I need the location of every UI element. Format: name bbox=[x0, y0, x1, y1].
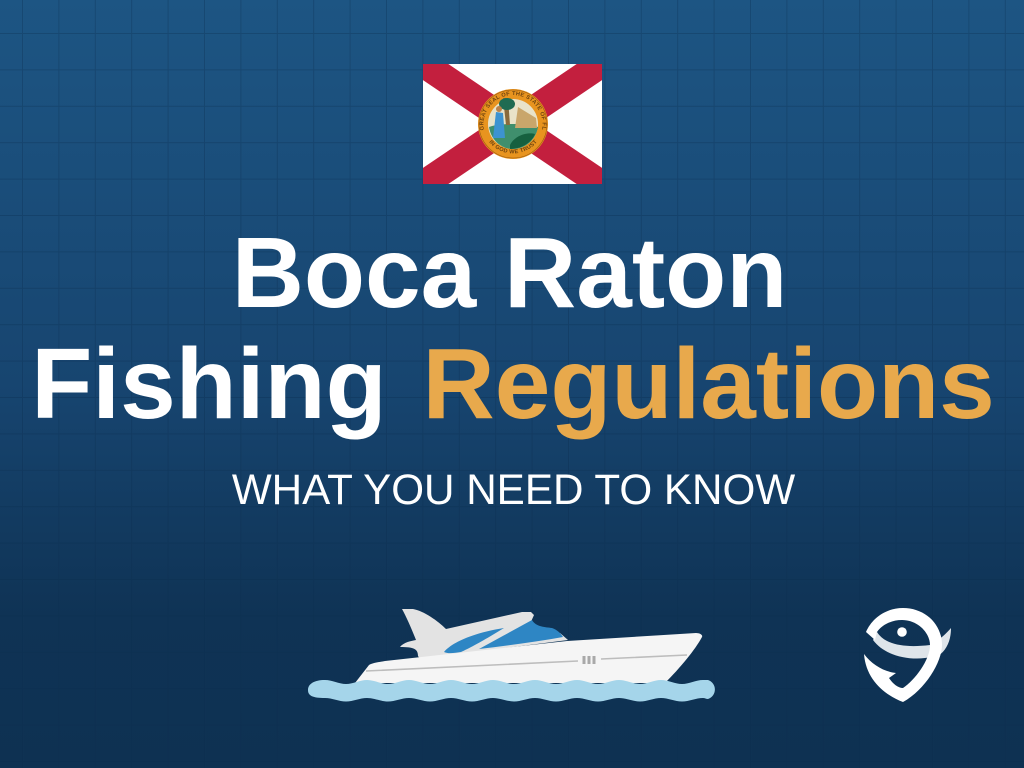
subtitle: WHAT YOU NEED TO KNOW bbox=[232, 466, 795, 513]
icon: state seal: IN GOD WE TRUST bbox=[489, 140, 536, 154]
icon: motor yacht on water bbox=[308, 609, 715, 702]
heading: Fishing Regulations: Fishing Regulations bbox=[31, 328, 995, 440]
logo light band and tail bbox=[873, 628, 951, 658]
hull stripe and vents bbox=[366, 655, 687, 671]
icon: fish hook logo bbox=[864, 608, 951, 702]
icon: state seal bbox=[478, 89, 548, 159]
yacht tinted windows bbox=[444, 620, 563, 653]
water waves bbox=[308, 680, 715, 702]
icon: Florida flag bbox=[423, 64, 602, 184]
yacht upper deck and fin bbox=[400, 609, 568, 659]
logo eye bbox=[897, 627, 907, 637]
logo white shape bbox=[864, 608, 942, 702]
heading: Boca Raton: Boca Raton bbox=[232, 217, 787, 329]
title bbox=[31, 217, 995, 440]
yacht hull bbox=[355, 633, 702, 683]
